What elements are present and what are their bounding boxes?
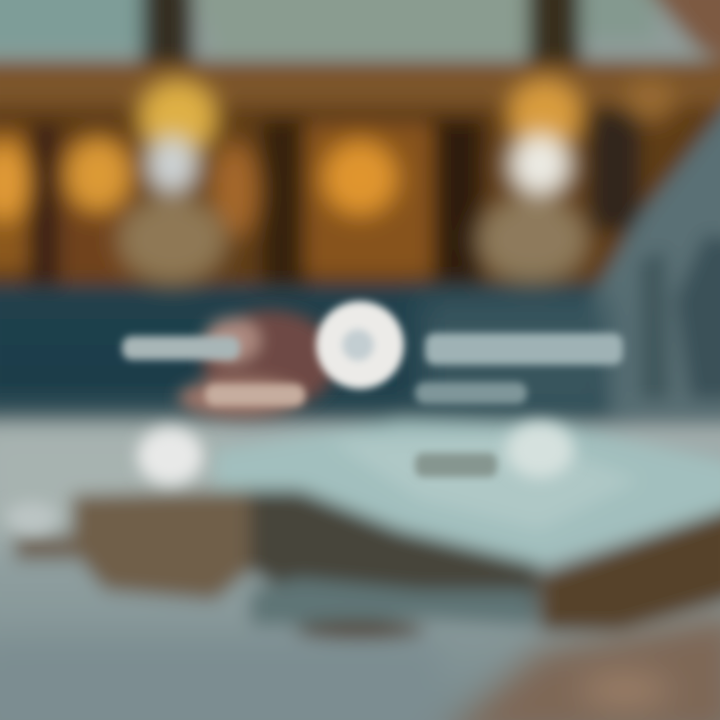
panel: open book pages (215, 420, 720, 565)
text block: small label on book (415, 453, 497, 477)
callout: left pink-brown cluster (178, 310, 338, 418)
panel: book brown left block (15, 490, 262, 600)
icon: central white circle (316, 301, 404, 389)
panel: grey-blue blanket on the right (420, 90, 720, 425)
label: central title text and icon placeholders (122, 301, 623, 418)
panel: table surface (0, 406, 210, 542)
icon: right hanging lamp (476, 79, 588, 284)
icon: small white spot far left (6, 502, 58, 534)
icon: small white circle right (506, 422, 574, 478)
panel: wooden table corner (440, 610, 720, 720)
icon: left hanging lamp (117, 80, 227, 284)
panel: book spine shadow (250, 490, 720, 630)
text block: left pale label (122, 336, 305, 406)
panel: dark wall columns (0, 110, 640, 285)
icon: wall lights glow (0, 78, 675, 238)
panel: ceiling and beams (0, 0, 720, 106)
text block: right pale label (415, 333, 623, 404)
icon: small white circle left (137, 427, 203, 485)
panel: blue-grey cloth under book (250, 578, 535, 639)
